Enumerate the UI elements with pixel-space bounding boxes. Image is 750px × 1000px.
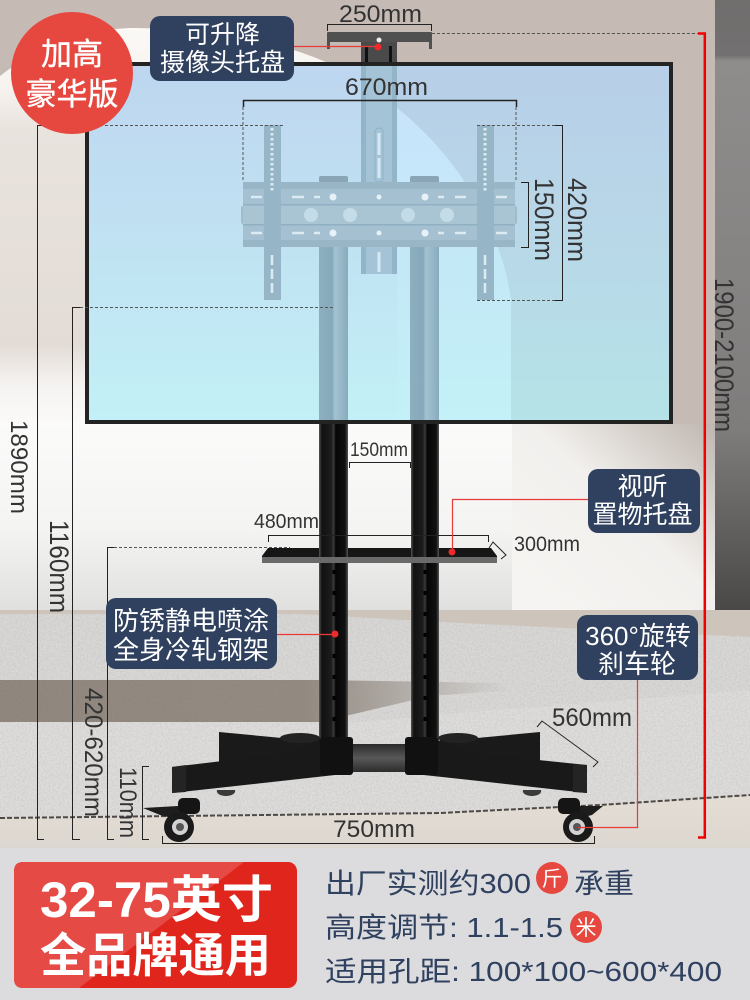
dimension labels: 250mm [339,1,422,28]
dimension labels: 420mm [562,178,592,262]
dimension labels: 560mm [552,704,632,732]
size panel: 全品牌通用 [40,929,271,982]
dotted guide lines [80,34,700,548]
dimension labels: 300mm [514,533,580,556]
badge: premium height [11,12,133,134]
mount seen through screen [241,66,517,420]
stand poles [319,420,439,740]
callout: brake wheels: 刹车轮 [598,649,676,679]
dimension lines [38,24,598,844]
spec: load capacity: 斤 [542,868,562,891]
callout: AV shelf: 置物托盘 [592,501,693,529]
dimension labels: 420-620mm [79,688,107,817]
bottom strip [0,848,750,1000]
spec: load capacity: 出厂实测约300 [325,868,531,899]
callout: steel frame: 防锈静电喷涂 [113,606,269,636]
callout: camera tray: 摄像头托盘 [160,49,285,77]
callout: steel frame [106,598,277,669]
callout: AV shelf: 视听 [617,473,668,501]
spec: load capacity: 承重 [574,868,634,899]
dimension labels: 480mm [254,511,319,533]
callout: camera tray [150,16,294,81]
callout: steel frame: 全身冷轧钢架 [113,635,269,665]
dimension labels: 150mm [350,440,408,461]
dimension labels: 1160mm [44,520,74,613]
callout: camera tray: 可升降 [185,21,260,49]
dimension labels: 750mm [333,816,415,843]
red leader lines [277,46,638,828]
badge: premium height: 豪华版 [26,77,118,112]
dimension labels [5,1,632,843]
camera tray [327,32,432,62]
callout: brake wheels [577,615,698,680]
spec: load capacity [325,862,634,899]
base: legs and wheels [143,732,603,842]
spec: hole spacing: 适用孔距: 100*100~600*400 [325,956,722,987]
height bracket 1900-2100mm [698,34,739,838]
size panel: 32-75英寸 [40,872,273,928]
callout: AV shelf [588,469,700,533]
height bracket 1900-2100mm: 1900-2100mm [709,278,739,432]
spec: height adjust: 米 [576,917,596,940]
callout: brake wheels: 360°旋转 [585,621,691,651]
spec: height adjust: 高度调节: 1.1-1.5 [325,912,563,943]
leader dots [332,44,456,638]
dimension labels: 150mm [529,178,559,261]
TV screen [85,62,673,424]
size panel [14,862,297,988]
shelf tray [262,546,497,563]
dimension labels: 110mm [114,767,141,838]
dimension labels: 1890mm [5,420,32,514]
badge: premium height: 加高 [41,37,103,72]
dimension labels: 670mm [345,74,428,101]
